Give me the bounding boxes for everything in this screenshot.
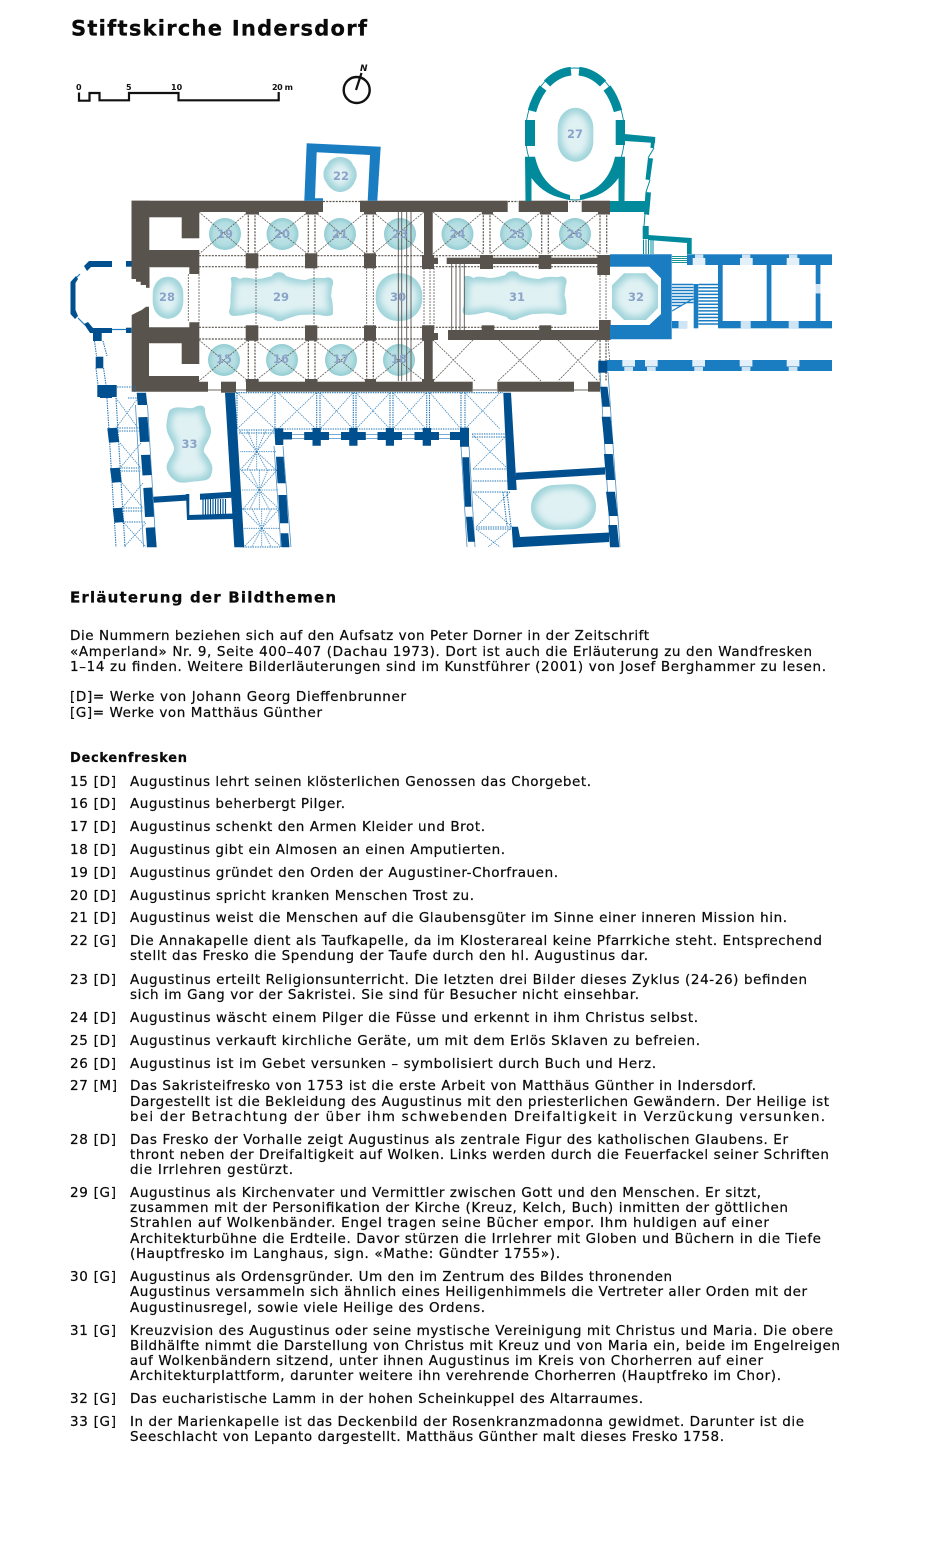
fresco numbers: 27 [567,127,583,141]
item 31: Architekturplattform, darunter weitere ihn verehrende Chorherren (Hauptfreko im Chor). [130,1368,781,1384]
fresco numbers: 20 [274,227,290,241]
item 20: Augustinus spricht kranken Menschen Trost zu. [130,888,474,904]
fresco numbers [159,127,644,451]
item 28: die Irrlehren gestürzt. [130,1162,293,1178]
fresco numbers: 25 [509,227,525,241]
fresco numbers: 15 [216,352,232,366]
item 30: 30 [G] [70,1269,116,1285]
item 21: 21 [D] [70,910,116,926]
item 16: 16 [D] [70,796,116,812]
icon: north arrow [344,64,370,103]
item 27 [70,1078,829,1125]
intro text: «Amperland» Nr. 9, Seite 400–407 (Dachau 1973). Dort ist auch die Erläuterung zu den Wandfresken [70,644,812,660]
item 31: auf Wolkenbändern sitzend, unter ihnen Augustinus im Kreis von Chorherren auf einer [130,1353,763,1369]
item 29: (Hauptfresko im Langhaus, sign. «Mathe: Gündter 1755»). [130,1246,560,1262]
item 23: sich im Gang vor der Sakristei. Sie sind für Besucher nicht einsehbar. [130,987,639,1003]
item 25: Augustinus verkauft kirchliche Geräte, um mit dem Erlös Sklaven zu befreien. [130,1033,700,1049]
item 17: Augustinus schenkt den Armen Kleider und Brot. [130,819,485,835]
item 30: Augustinus als Ordensgründer. Um den im Zentrum des Bildes thronenden [130,1269,672,1285]
scale bar: 5 [126,83,132,92]
item 22: 22 [G] [70,933,116,949]
fresco numbers: 28 [159,290,175,304]
fresco numbers: 19 [217,227,233,241]
item 27: Dargestellt ist die Bekleidung des Augustinus mit den priesterlichen Gewändern. Der Heilige ist [130,1094,829,1110]
item 29: Augustinus als Kirchenvater und Vermittler zwischen Gott und den Menschen. Er sitzt, [130,1185,761,1201]
item 17: 17 [D] [70,819,116,835]
title: Stiftskirche Indersdorf [71,16,368,40]
fresco numbers: 29 [273,290,289,304]
item 16: Augustinus beherbergt Pilger. [130,796,345,812]
item 22: stellt das Fresko die Spendung der Taufe durch den hl. Augustinus dar. [130,948,648,964]
fresco numbers: 22 [333,169,349,183]
item 32: Das eucharistische Lamm in der hohen Scheinkuppel des Altarraumes. [130,1391,643,1407]
item 22 [70,933,822,964]
fresco numbers: 17 [333,352,349,366]
fresco numbers: 31 [509,290,525,304]
scale bar: 20 m [272,83,293,92]
item 18: 18 [D] [70,842,116,858]
item 32: 32 [G] [70,1391,116,1407]
Sakristei walls [525,68,692,262]
Annakapelle walls [304,143,381,201]
star vaults [239,430,281,547]
item 27: Das Sakristeifresko von 1753 ist die erste Arbeit von Matthäus Günther in Indersdorf. [130,1078,756,1094]
item 33 [70,1414,804,1445]
artist legend: [D]= Werke von Johann Georg Dieffenbrunner [70,689,406,705]
item 28: thront neben der Dreifaltigkeit auf Wolken. Links werden durch die Feuerfackel seiner Schriften [130,1147,829,1163]
item 15: 15 [D] [70,774,116,790]
fresco numbers: 30 [390,290,406,304]
vault lines: southern wings [94,341,512,547]
icon: north arrow: N [360,64,368,74]
scale bar [76,83,293,101]
scale bar: 10 [171,83,183,92]
item 28: Das Fresko der Vorhalle zeigt Augustinus als zentrale Figur des katholischen Glaubens. Er [130,1132,788,1148]
item 19: 19 [D] [70,865,116,881]
heading: ceiling frescoes: Deckenfresken [70,751,187,766]
item 23: Augustinus erteilt Religionsunterricht. Die letzten drei Bilder dieses Zyklus (24-26) befinden [130,972,807,988]
fresco numbers: 21 [332,227,348,241]
fresco numbers: 32 [628,290,644,304]
fresco numbers: 18 [391,352,407,366]
fresco numbers: 23 [392,227,408,241]
scale bar: 0 [76,83,82,92]
item 26: 26 [D] [70,1056,116,1072]
item 19: Augustinus gründet den Orden der Augustiner-Chorfrauen. [130,865,558,881]
item 15: Augustinus lehrt seinen klösterlichen Genossen das Chorgebet. [130,774,591,790]
item 31 [70,1323,840,1384]
intro text [70,628,826,675]
item 27: 27 [M] [70,1078,117,1094]
item 30: Augustinus versammeln sich ähnlich eines Heiligenhimmels die Vertreter aller Orden mit der [130,1284,807,1300]
item 22: Die Annakapelle dient als Taufkapelle, da im Klosterareal keine Pfarrkiche steht. Entsprechend [130,933,822,949]
artist legend [70,689,406,721]
intro text: Die Nummern beziehen sich auf den Aufsatz von Peter Dorner in der Zeitschrift [70,628,649,644]
fresco numbers: 24 [449,227,466,241]
item 33: In der Marienkapelle ist das Deckenbild der Rosenkranzmadonna gewidmet. Darunter ist die [130,1414,804,1430]
item 29: Architekturbühne die Erdteile. Davor stürzen die Irrlehrer mit Globen und Büchern in die Tiefe [130,1231,821,1247]
artist legend: [G]= Werke von Matthäus Günther [70,705,322,721]
east wing walls [607,254,832,371]
heading: explanation: Erläuterung der Bildthemen [70,588,336,606]
item 18: Augustinus gibt ein Almosen an einen Amputierten. [130,842,505,858]
item 30: Augustinusregel, sowie viele Heilige des Ordens. [130,1300,485,1316]
fresco numbers: 16 [273,352,289,366]
item 23: 23 [D] [70,972,116,988]
floor plan [70,68,832,548]
item 33: Seeschlacht von Lepanto dargestellt. Matthäus Günther malt dieses Fresko 1758. [130,1429,724,1445]
main church walls [132,201,611,393]
item 29: zusammen mit der Personifikation der Kirche (Kreuz, Kelch, Buch) inmitten der göttlichen [130,1200,788,1216]
item 27: bei der Betrachtung der über ihm schwebenden Dreifaltigkeit in Verzückung versunken. [130,1109,825,1125]
item 33: 33 [G] [70,1414,116,1430]
item 23 [70,972,807,1003]
fresco fields [153,108,658,531]
item 24: Augustinus wäscht einem Pilger die Füsse und erkennt in ihm Christus selbst. [130,1010,698,1026]
item 29: Strahlen auf Wolkenbänder. Engel tragen seine Bücher empor. Ihm huldigen auf einer [130,1215,769,1231]
item 31: Bildhälfte nimmt die Darstellung von Christus mit Kreuz und von Maria ein, beide im Engelreigen [130,1338,840,1354]
item 28: 28 [D] [70,1132,116,1148]
item 28 [70,1132,829,1178]
fresco list [70,774,840,1445]
vault lines [149,202,610,390]
item 31: Kreuzvision des Augustinus oder seine mystische Vereinigung mit Christus und Maria. Die obere [130,1323,833,1339]
item 29 [70,1185,821,1262]
item 29: 29 [G] [70,1185,116,1201]
item 30 [70,1269,807,1316]
item 21: Augustinus weist die Menschen auf die Glaubensgüter im Sinne einer inneren Mission hin. [130,910,787,926]
item 31: 31 [G] [70,1323,116,1339]
item 20: 20 [D] [70,888,116,904]
fresco numbers: 33 [181,437,198,451]
item 24: 24 [D] [70,1010,116,1026]
western narthex walls [70,261,132,341]
intro text: 1–14 zu finden. Weitere Bilderläuterungen sind im Kunstführer (2001) von Josef Berghammer zu lesen. [70,659,826,675]
fresco numbers: 26 [566,227,583,241]
item 26: Augustinus ist im Gebet versunken – symbolisiert durch Buch und Herz. [130,1056,656,1072]
item 25: 25 [D] [70,1033,116,1049]
southern wings walls [94,341,620,548]
